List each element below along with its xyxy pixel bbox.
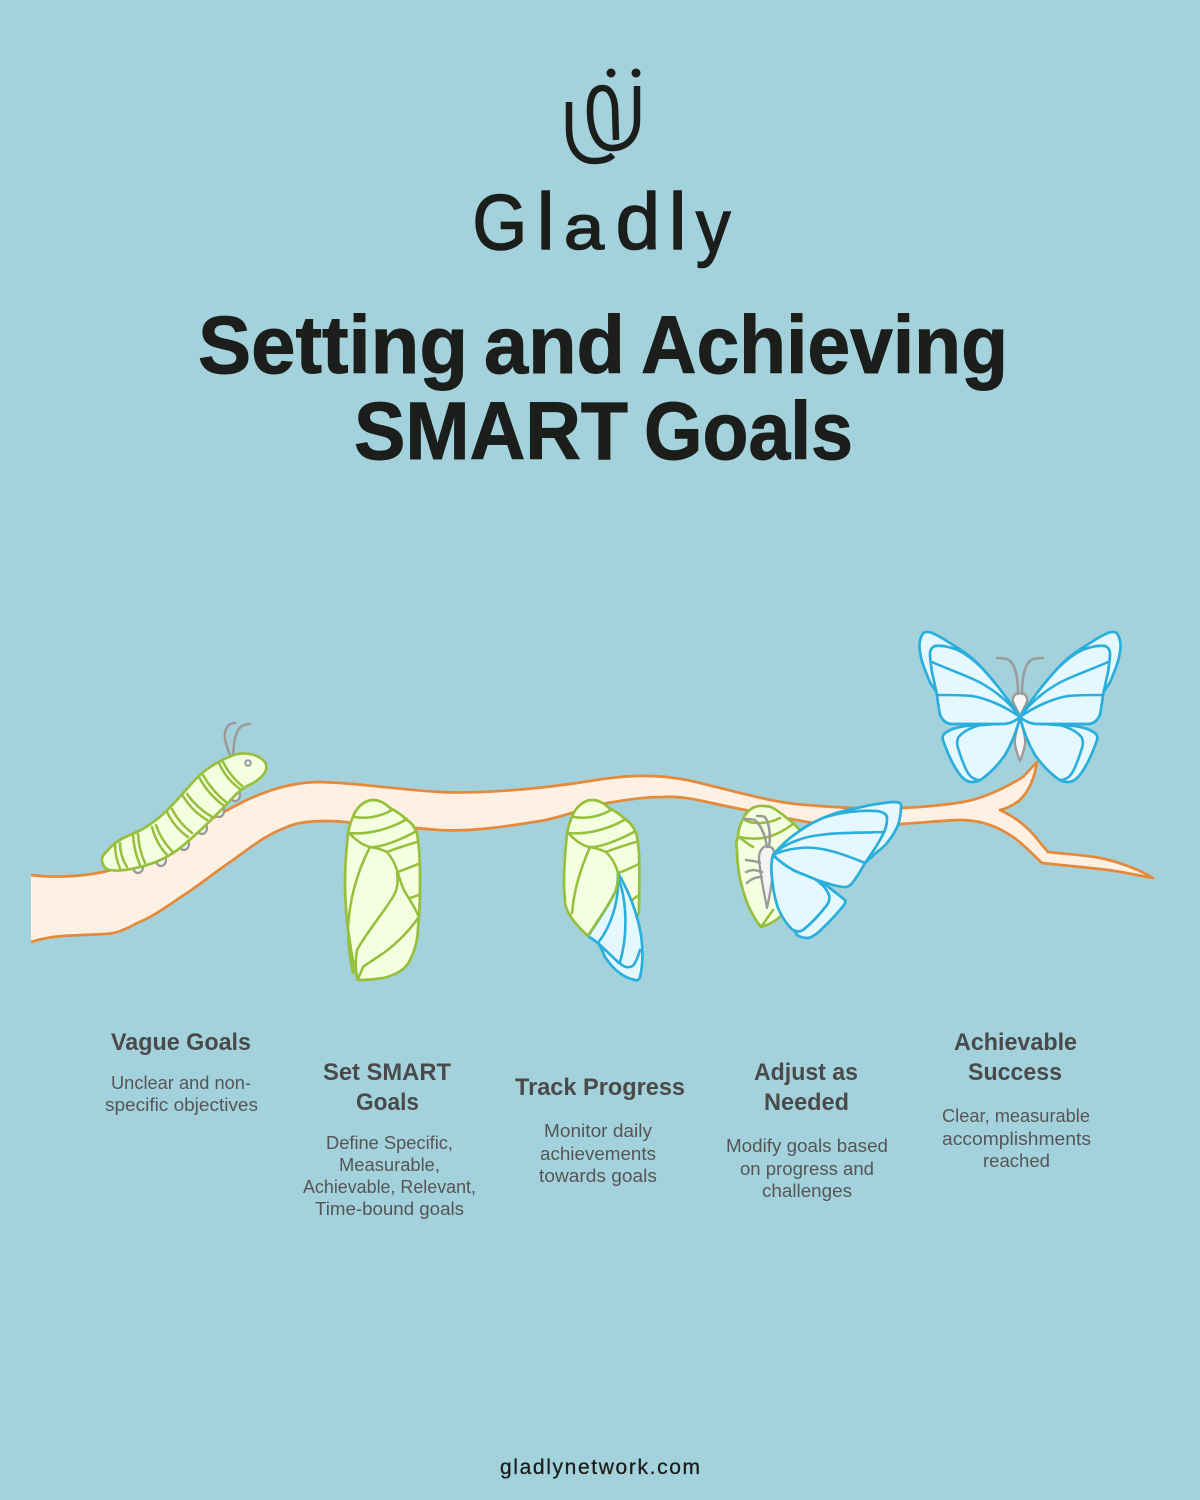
step 5: Achievable Success: accomplishments <box>942 1129 1091 1149</box>
title <box>198 300 1008 477</box>
step 4: Adjust as Needed: on progress and <box>740 1159 874 1179</box>
step 5: Achievable Success: Clear, measurable <box>942 1106 1090 1126</box>
icon: caterpillar <box>102 723 266 873</box>
icon: butterfly <box>919 632 1121 782</box>
step 4: Adjust as Needed <box>726 1059 888 1201</box>
icon: chrysalis <box>345 800 420 980</box>
step 1: Vague Goals: specific objectives <box>105 1095 258 1115</box>
step 1: Vague Goals: Vague Goals <box>111 1029 251 1056</box>
branch <box>31 762 1153 942</box>
step 2: Set SMART Goals: Set SMART <box>323 1059 451 1086</box>
step 5: Achievable Success: Achievable <box>954 1029 1077 1056</box>
step 3: Track Progress: towards goals <box>539 1166 657 1186</box>
logo wordmark: a <box>564 194 605 263</box>
logo wordmark <box>472 177 731 268</box>
step 2: Set SMART Goals: Time-bound goals <box>315 1199 464 1219</box>
step 2: Set SMART Goals <box>303 1059 476 1219</box>
icon: chrysalis opening <box>564 800 642 980</box>
step 4: Adjust as Needed: Adjust as <box>754 1059 858 1086</box>
step 5: Achievable Success <box>942 1029 1091 1171</box>
logo wordmark: d <box>616 177 660 266</box>
step 2: Set SMART Goals: Define Specific, <box>326 1133 453 1153</box>
icon: chrysalis with emerging butterfly <box>736 802 901 938</box>
step 5: Achievable Success: Success <box>968 1059 1062 1086</box>
title: Achieving <box>641 300 1008 391</box>
step 4: Adjust as Needed: Modify goals based <box>726 1136 888 1156</box>
logo wordmark: y <box>696 184 731 268</box>
step 3: Track Progress <box>515 1074 685 1186</box>
step 4: Adjust as Needed: challenges <box>762 1181 852 1201</box>
title: and <box>484 300 625 391</box>
step 2: Set SMART Goals: Achievable, Relevant, <box>303 1177 476 1197</box>
step 4: Adjust as Needed: Needed <box>764 1089 849 1116</box>
logo wordmark: l <box>537 177 554 266</box>
step 3: Track Progress: achievements <box>540 1144 656 1164</box>
step 5: Achievable Success: reached <box>983 1151 1050 1171</box>
step 1: Vague Goals: Unclear and non- <box>111 1073 251 1093</box>
step 2: Set SMART Goals: Measurable, <box>339 1155 440 1175</box>
logo wordmark: l <box>669 177 686 266</box>
footer url: gladlynetwork.com <box>500 1456 700 1479</box>
step 1: Vague Goals <box>105 1029 258 1115</box>
logo wordmark: G <box>472 178 527 266</box>
step 3: Track Progress: Monitor daily <box>544 1121 652 1141</box>
title: Goals <box>644 386 853 477</box>
step 2: Set SMART Goals: Goals <box>356 1089 419 1116</box>
logo: Gladly mark <box>569 68 640 161</box>
step 3: Track Progress: Track Progress <box>515 1074 685 1101</box>
title: SMART <box>354 386 628 477</box>
title: Setting <box>198 300 468 391</box>
